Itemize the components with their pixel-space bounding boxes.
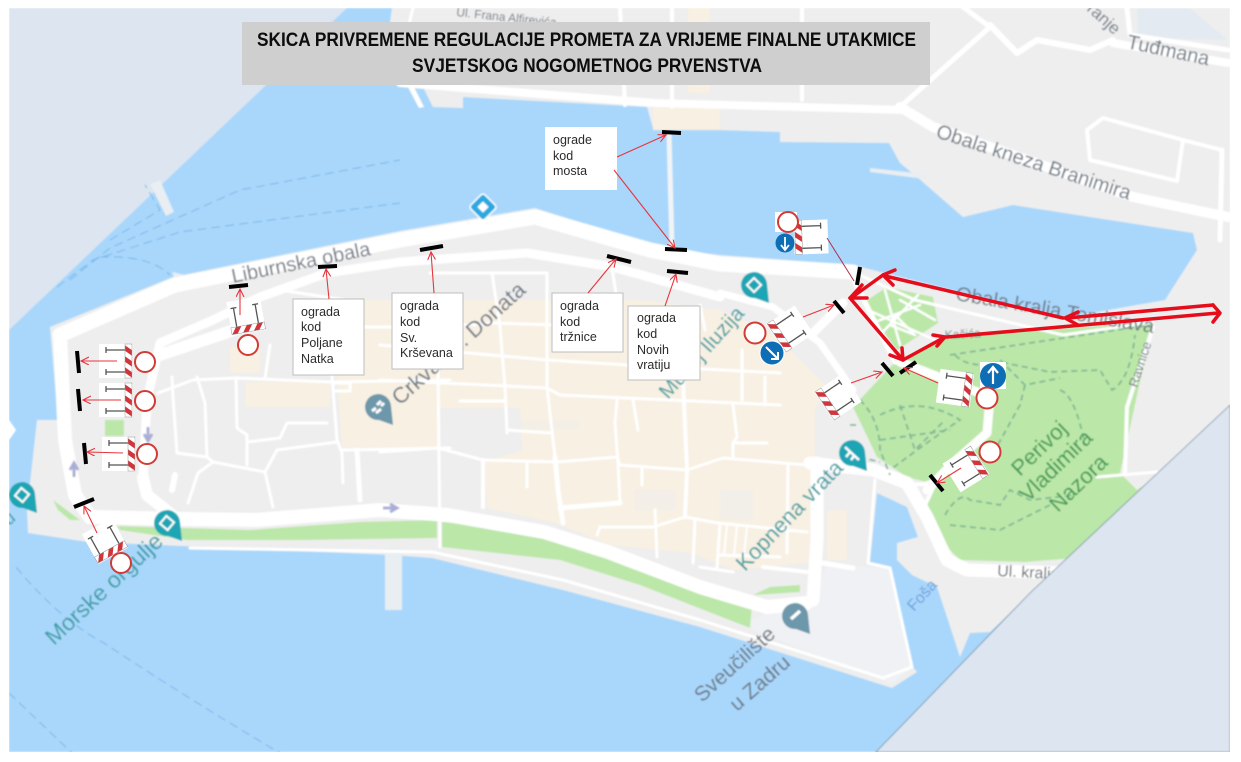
callout: ograda kod Poljane Natka: kod	[301, 320, 321, 334]
street label: Franje Tudmana	[1086, 8, 1209, 66]
street label: Ravnice: Ravnice	[1126, 340, 1154, 389]
callout: ograda kod Sv. Krsevana: Krševana	[400, 346, 453, 360]
callout: ograda kod trznice: tržnice	[560, 330, 597, 344]
pin: parking	[469, 193, 497, 221]
sign: barrier Nova vrata	[744, 305, 814, 365]
callout: ograda kod Novih vratiju: kod	[637, 327, 657, 341]
one-way arrows on roads	[70, 427, 397, 512]
callout: ograda kod Sv. Krsevana: Sv.	[400, 331, 417, 345]
parks	[53, 287, 1153, 628]
sign: barrier north of quay	[775, 212, 829, 255]
pin: Muzej Iluzija	[741, 272, 769, 303]
pin: Kopnena vrata	[839, 440, 867, 471]
title banner	[242, 22, 930, 85]
callout: ograda kod Sv. Krsevana: ograda	[400, 299, 439, 313]
water label: Fosa: Foša	[904, 577, 941, 615]
sign: barrier north-west	[226, 296, 266, 355]
callout: ograda kod Novih vratiju: ograda	[637, 311, 676, 325]
place label: Sveuciliste u Zadru: Sveučilište	[690, 622, 780, 707]
pin: left edge	[9, 482, 37, 513]
sign: barrier west 3	[102, 437, 157, 471]
street label: Franje Tudmana: ranje	[1083, 0, 1124, 38]
open area top left	[9, 8, 347, 330]
old town beige blocks	[230, 8, 847, 570]
place label: Muzej Iluzija: Muzej Iluzija	[655, 302, 749, 403]
pin: Sveuciliste	[782, 603, 810, 634]
north land	[390, 8, 1230, 300]
thick red traffic route arrows	[850, 270, 1220, 360]
place label: Perivoj Vladimira Nazora: Nazora	[1044, 449, 1113, 517]
street label: Kaciceva: Kačića	[944, 326, 981, 342]
callout: ograda kod Novih vratiju	[628, 306, 700, 380]
street label: Ul. kralja: Ul. kralja	[997, 563, 1060, 583]
place label: Perivoj Vladimira Nazora: Vladimira	[1014, 424, 1098, 507]
water routes	[9, 160, 400, 753]
south quarter lighter ground	[740, 565, 913, 684]
callout: ograda kod Sv. Krsevana: kod	[400, 315, 420, 329]
sign: barrier south-west	[82, 518, 131, 573]
place label: Crkva Sv. Donata: Crkva Sv. Donata	[387, 276, 531, 410]
upper right block	[1137, 8, 1228, 40]
callout: ograda kod Poljane Natka	[293, 299, 364, 375]
callout: ograde kod mosta: kod	[553, 149, 573, 163]
sign: barrier west 2	[99, 383, 155, 417]
callout: ograde kod mosta	[545, 127, 617, 190]
thin red pointer arrows	[81, 135, 961, 533]
old town streets	[158, 268, 853, 572]
place label: Sveuciliste u Zadru: u Zadru	[725, 651, 795, 716]
street label: Obala kralja Tomislava: Obala kralja Tomislava	[954, 283, 1157, 338]
place label: Kopnena vrata: Kopnena vrata	[731, 455, 849, 575]
street label: Ul. Frana Alfirevica: Ul. Frana Alfirevića	[456, 5, 558, 30]
callout: ograda kod Novih vratiju: Novih	[637, 343, 669, 357]
sign: barrier west 1	[99, 344, 155, 378]
piers	[9, 87, 925, 610]
callout: ograda kod Poljane Natka: Natka	[301, 352, 334, 366]
callout: ograda kod Sv. Krsevana	[392, 293, 463, 369]
pin: Crkva Sv. Donata	[365, 394, 393, 425]
sign: barrier park south	[943, 442, 1000, 492]
callout: ograda kod Novih vratiju: vratiju	[637, 358, 670, 372]
place label: Morske orgulje: Morske orgulje	[40, 528, 168, 650]
sign: barrier park entrance	[936, 362, 1006, 408]
park footpaths	[850, 325, 1150, 530]
street label: Obala kneza Branimira: Obala kneza Branimira	[933, 121, 1135, 205]
old town peninsula and east land	[27, 208, 1230, 688]
park garden paths	[868, 290, 935, 345]
callout: ograda kod trznice: ograda	[560, 299, 599, 313]
black barrier marks	[74, 132, 943, 507]
callout: ograda kod Poljane Natka: Poljane	[301, 336, 343, 350]
sign: barrier park west	[814, 373, 862, 421]
title banner: SKICA PRIVREMENE REGULACIJE PROMETA ZA VRIJEME FINALNE UTAKMICE	[257, 30, 916, 51]
street label: Liburnska obala: Liburnska obala	[230, 238, 373, 288]
title banner: SVJETSKOG NOGOMETNOG PRVENSTVA	[412, 56, 762, 77]
grey patches	[510, 275, 753, 520]
callout: ograda kod trznice	[552, 293, 623, 352]
callout: ograde kod mosta: mosta	[553, 164, 587, 178]
open area bottom right	[876, 405, 1230, 752]
street label: Franje Tudmana: Tuđmana	[1125, 31, 1212, 70]
callout: ograda kod Poljane Natka: ograda	[301, 305, 340, 319]
pin: Morske orgulje	[154, 510, 182, 541]
place label: Perivoj Vladimira Nazora: Perivoj	[1006, 416, 1072, 481]
callout: ograda kod trznice: kod	[560, 315, 580, 329]
callout: ograde kod mosta: ograde	[553, 133, 592, 147]
